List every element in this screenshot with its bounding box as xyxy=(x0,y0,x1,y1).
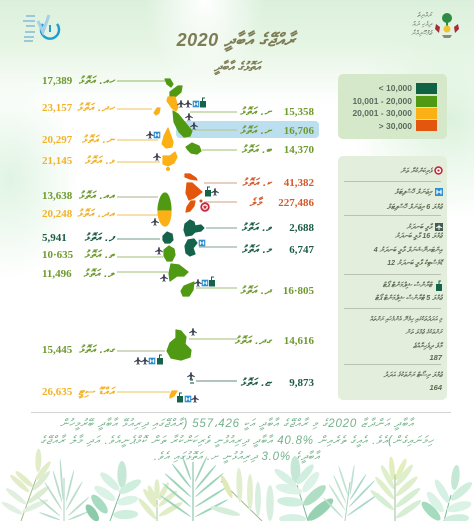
atoll populations: left column: އއ. އަތޮޅު xyxy=(79,190,115,202)
plant 10: broad teal xyxy=(419,465,474,521)
atoll populations: left column: ނ. އަތޮޅު xyxy=(82,134,115,146)
atoll populations: left column: 21,145 xyxy=(42,155,72,167)
atoll populations: right column: ކ. އަތޮޅު xyxy=(242,177,272,189)
atoll populations: left column: 13,638 xyxy=(42,190,72,202)
key: airports: ވާލީ ބަނދަރު xyxy=(407,224,432,230)
legend: population ranges: 20,001 - 30,000 xyxy=(352,108,412,118)
decorative leaves xyxy=(2,448,472,521)
logo: national emblem xyxy=(411,12,459,38)
plant 1: olive xyxy=(0,448,53,521)
atoll populations: left column: 20,248 xyxy=(42,208,72,220)
icon: star xyxy=(434,166,443,175)
panel: facilities key: އިންޓަރނޭޝަނަލް ވާލީ ބަނދަރު 4 xyxy=(374,246,442,254)
plant 4: olive xyxy=(137,479,184,521)
key: ports: ޓްރާންސް ޝިޕްމަންޓް ޕޯޓް xyxy=(383,282,432,288)
atoll populations: right column: ވ. އަތޮޅު xyxy=(242,222,272,234)
icon: airport xyxy=(435,223,443,231)
atoll populations: left column: ޅ. އަތޮޅު xyxy=(85,155,115,167)
plant 5: palm xyxy=(160,455,228,521)
atoll populations: left column: ހދ. އަތޮޅު xyxy=(77,102,115,114)
plant 2: thin fronds xyxy=(38,458,90,521)
plant 9: yellow green xyxy=(369,456,423,521)
subtitle: އަތޮޅުގެ އާބާދީ xyxy=(214,59,260,74)
atoll populations: left column: އދ. އަތޮޅު xyxy=(77,208,115,220)
atoll populations: right column: 6,747 xyxy=(289,244,314,256)
atoll populations: left column: ގއ. އަތޮޅު xyxy=(79,344,115,356)
panel: facilities key: ޖުމްލަ 5 ޓްރާންސް ޝިޕްމަންޓް ޕޯޓް xyxy=(375,294,442,302)
value: 164: 164 xyxy=(429,382,442,392)
atoll populations: left column: ތ. އަތޮޅު xyxy=(84,249,115,261)
atoll populations: right column: 2,688 xyxy=(289,222,314,234)
highlight: selected atoll row xyxy=(176,121,319,138)
atoll populations: right column: 15,358 xyxy=(284,106,314,118)
atoll populations: left column: ލ. އަތޮޅު xyxy=(84,268,115,280)
atoll populations: right column: 14,370 xyxy=(284,144,314,156)
legend: population ranges: 10,001 - 20,000 xyxy=(352,96,412,106)
map: atolls and leader lines xyxy=(117,78,237,403)
icon: capital star xyxy=(201,203,209,211)
atoll populations: left column: 11,496 xyxy=(42,268,72,280)
icons: airports, hospitals, ports xyxy=(134,98,219,403)
key: hospital: ރިޖަނަލް ހޮސްޕިޓަލް xyxy=(395,188,432,196)
atoll populations: right column: މާލެ xyxy=(250,197,262,209)
atoll populations: left column: ފ. އަތޮޅު xyxy=(85,232,115,244)
divider xyxy=(31,412,451,413)
logo: left xyxy=(23,14,60,42)
key: resort islands: ޖުމްލަ ރިސޯޓް ރަށްތަކުގެ އަދަދު xyxy=(384,372,442,378)
ministry name: ޖުމްހޫރިއްޔާ xyxy=(411,30,432,37)
atoll populations: right column: 9,873 xyxy=(289,377,314,389)
plant 8: palm xyxy=(322,464,380,521)
panel: facilities key: ޖުމްލަ 16 ވާލީ ބަނދަރު xyxy=(395,232,442,240)
panel: facilities key xyxy=(338,156,447,400)
panel: facilities key: ޑޮމެސްޓިކް ވާލީ ބަނދަރު 12 xyxy=(387,260,442,266)
key: inhabited islands: މި އަދަދުތަކުގައި ހިމެނޭ އެންމެހައި ރަށްތައް xyxy=(370,316,442,322)
atoll populations: right column: ޏ. އަތޮޅު xyxy=(241,377,272,389)
icon: port xyxy=(436,280,442,291)
ministry name: ރައްޔިތު xyxy=(417,12,432,19)
legend: population ranges: < 10,000 xyxy=(379,83,412,93)
atoll populations: right column: މ. އަތޮޅު xyxy=(242,244,272,256)
atoll populations: right column: ދ. އަތޮޅު xyxy=(240,285,272,297)
icon: hospital xyxy=(435,188,443,196)
atoll populations: right column: 16,706 xyxy=(284,125,314,137)
plant 7: broad teal xyxy=(272,456,336,521)
ministry name xyxy=(411,12,433,37)
atoll populations: left column: 15,445 xyxy=(42,344,72,356)
atoll populations: left column: 26,635 xyxy=(42,386,72,398)
atolls xyxy=(154,79,204,398)
legend: population ranges: > 30,000 xyxy=(379,121,412,131)
value: 187: 187 xyxy=(429,352,442,362)
atoll populations: right column: ށ. އަތޮޅު xyxy=(240,125,272,137)
atoll populations: right column: ބ. އަތޮޅު xyxy=(242,144,272,156)
atoll populations: left column: 5,941 xyxy=(42,232,67,244)
plant 6: olive xyxy=(210,468,274,521)
atoll populations: left column: 20,297 xyxy=(42,134,72,146)
summary text: އާބާދީގެ %3.0 ދިރިއުޅުނީ ށ. އަތޮޅުގައި އެވެ. xyxy=(154,451,320,463)
panel: facilities key: ރަށްތަކުގެ ޖުމްލަ ތަން xyxy=(406,328,442,336)
atoll populations: right column xyxy=(234,106,314,389)
atoll populations: left column: އައްޑޫ ސިޓީ xyxy=(78,386,115,398)
atoll populations: left column xyxy=(42,75,116,398)
atoll populations: right column: 16·805 xyxy=(283,285,314,297)
summary text xyxy=(40,417,434,464)
atoll populations: left column: 23,157 xyxy=(42,102,72,114)
summary text: އާބާދީ އަންދާޒާ 2020ގެ މި ރާއްޖޭގެ އާބާދީ އަކީ 557،426 (ރާއްޖޭގައި ދިރިއުޅޭ އާބާދީ ބޭރުމީހުން xyxy=(60,418,414,430)
key: capital: ވެރިކަންކުރާ ތަން xyxy=(400,168,432,174)
atoll populations: right column: 14,616 xyxy=(284,335,314,347)
legend: population ranges xyxy=(338,74,447,139)
title: ރާއްޖޭގެ އާބާދީ 2020 xyxy=(177,30,295,50)
atoll populations: right column: ށ. އަތޮޅު xyxy=(240,106,272,118)
ministry name: ދިވެހި ދައު xyxy=(412,21,432,28)
atoll populations: right column: 41,382 xyxy=(284,177,314,189)
atoll populations: right column: 227,486 xyxy=(278,197,314,209)
atoll populations: right column: ގދ. އަތޮޅު xyxy=(235,335,272,347)
atoll populations: left column: 17,389 xyxy=(42,75,72,87)
atoll populations: left column: 10·635 xyxy=(42,249,73,261)
panel: facilities key: ޖުމްލަ 6 ރިޖަނަލް ހޮސްޕިޓަލް xyxy=(387,204,442,210)
summary text: ހިމަނައިގެން)އެވެ. އެއީގެ ތެރެއިން %40.8 އާބާދީ ދިރިއުޅުނީ ވެރިކަންކުރާ ތަން ކޮމްޕެނީއެވެ. އަދި މާލެ ރާއްޖޭގެ xyxy=(40,434,434,446)
background wash xyxy=(0,0,474,300)
panel: facilities key: މާލެ ދިވެހިރާއްޖެ xyxy=(413,342,442,350)
leader lines xyxy=(117,81,237,392)
atoll populations: left column: ހއ. އަތޮޅު xyxy=(79,75,115,87)
plant 3: broad teal xyxy=(83,461,143,521)
